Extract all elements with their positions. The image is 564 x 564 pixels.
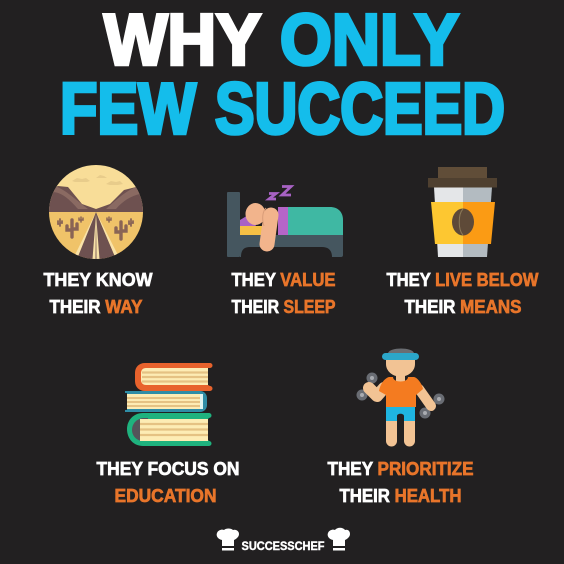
label: they live below their means: THEIR MEANS [404,296,522,317]
title [60,0,505,150]
label: they know their way: THEY KNOW [44,269,153,290]
icon: coffee cup [428,167,497,257]
label: they value their sleep: THEY VALUE [232,269,336,290]
label: they know their way: THEIR WAY [50,296,143,317]
title: FEW [60,70,196,150]
label: they focus on education: THEY FOCUS ON [96,458,240,479]
label: they live below their means [386,269,539,317]
title: WHY [104,0,261,80]
footer brand [217,528,350,553]
label: they focus on education [96,458,240,506]
label: they prioritize their health: THEY PRIORITIZE [328,458,474,479]
label: they focus on education: EDUCATION [114,485,216,506]
icon: chef hat left [217,528,239,550]
label: they prioritize their health: THEIR HEALTH [340,485,462,506]
label: they live below their means: THEY LIVE BELOW [386,269,539,290]
icon: stack of books [125,363,212,446]
icon: chef hat right [328,528,350,550]
top book [135,363,212,391]
icon: sleeping in bed [227,186,343,257]
label: they know their way [44,269,153,317]
label: they value their sleep: THEIR SLEEP [232,296,336,317]
icon: desert road [49,165,143,259]
label: they value their sleep [232,269,336,317]
bottom book [127,413,212,446]
middle book [125,391,207,412]
title: ONLY [280,0,459,80]
brand name: SUCCESSCHEF [242,541,324,553]
title: SUCCEED [215,70,505,150]
icon: man exercising with dumbbells [356,348,444,441]
label: they prioritize their health [328,458,474,506]
